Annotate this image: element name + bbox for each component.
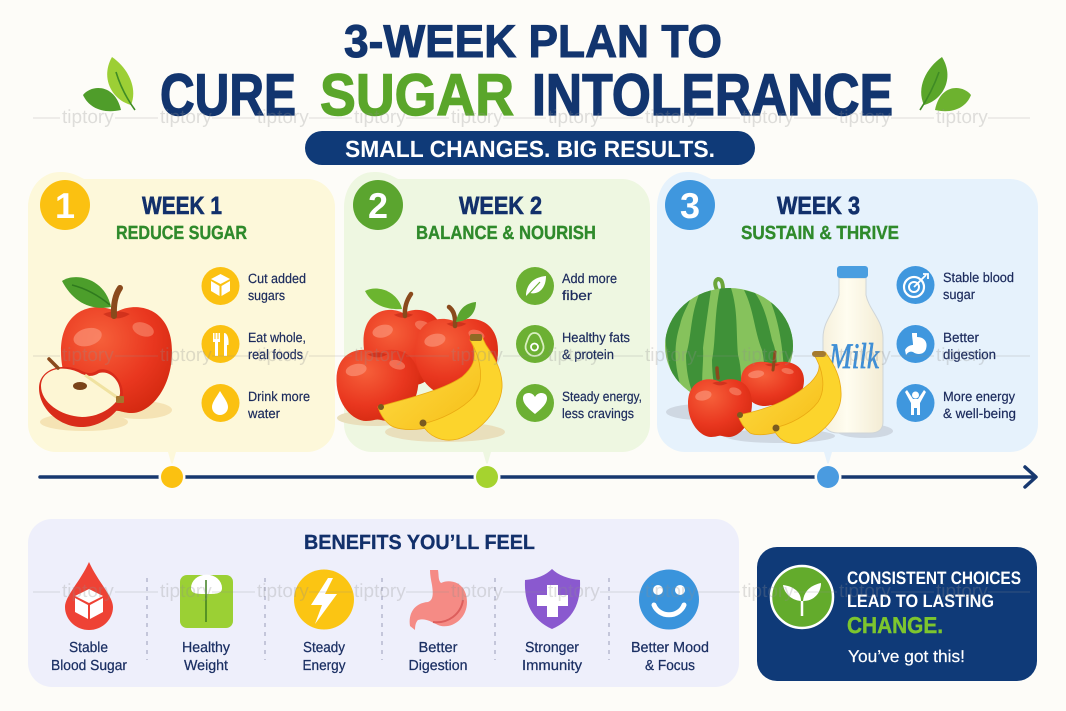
- watermark row 1: tiptory: [160, 107, 212, 128]
- panel background: [344, 172, 650, 466]
- icon: right leaves: [920, 57, 971, 111]
- panel: week 1: [28, 172, 335, 466]
- benefit: stable blood sugar: [51, 562, 127, 674]
- title line 2: sugar: SUGAR: [320, 62, 514, 128]
- callout: CHANGE.: [847, 612, 943, 638]
- item: eat whole foods: Eat whole,: [248, 330, 306, 345]
- panel background: [28, 519, 739, 687]
- watermark row 1: [33, 107, 1030, 128]
- benefit: better digestion: [408, 570, 468, 674]
- item: stable blood sugar: Stable blood: [943, 270, 1014, 285]
- watermark row 1: tiptory: [257, 107, 309, 128]
- benefit: stronger immunity: [522, 569, 583, 674]
- watermark row 1: tiptory: [839, 107, 891, 128]
- benefit: better mood: [631, 570, 709, 674]
- milk bottle: [823, 266, 883, 433]
- watermark row 1: tiptory: [742, 107, 794, 128]
- item: healthy fats: [516, 325, 630, 363]
- item: more energy: [896, 384, 1016, 422]
- benefit: steady energy: Energy: [302, 658, 346, 674]
- item: add more fiber: Add more: [562, 271, 617, 286]
- marker week 3: [814, 464, 842, 490]
- watermark row 2: tiptory: [742, 345, 794, 366]
- item: drink more water: Drink more: [248, 389, 310, 404]
- benefit: steady energy: [294, 570, 354, 674]
- icon: left leaves: [83, 57, 135, 111]
- watermark row 3: tiptory: [645, 581, 697, 602]
- heading week 1: WEEK 1: [142, 192, 222, 220]
- item: drink more water: water: [247, 406, 280, 421]
- benefit: stronger immunity: Immunity: [522, 658, 583, 674]
- benefit: healthy weight: Healthy: [182, 640, 231, 656]
- benefit: better mood: Better Mood: [631, 640, 709, 656]
- panel: benefits: [28, 519, 739, 687]
- illustration: apples and bananas: [336, 288, 505, 442]
- benefit: stable blood sugar: Stable: [69, 640, 108, 656]
- watermark row 3: tiptory: [451, 581, 503, 602]
- benefit: better mood: & Focus: [645, 658, 695, 674]
- subheading balance and nourish: BALANCE & NOURISH: [416, 223, 596, 244]
- title line 2: intolerance: INTOLERANCE: [532, 62, 893, 128]
- watermark row 1: tiptory: [62, 107, 114, 128]
- benefit: steady energy: Steady: [303, 640, 346, 656]
- item: healthy fats: Healthy fats: [562, 330, 630, 345]
- subheading sustain and thrive: SUSTAIN & THRIVE: [741, 223, 899, 244]
- panel background: [28, 172, 335, 466]
- panel: week 2: [336, 172, 650, 466]
- watermark row 2: tiptory: [451, 345, 503, 366]
- benefit: better digestion: Digestion: [408, 658, 468, 674]
- item: steady energy: Steady energy,: [562, 389, 642, 404]
- badge 3: [665, 180, 715, 230]
- heading week 2: WEEK 2: [459, 192, 542, 220]
- item: add more fiber: [516, 267, 617, 305]
- subtitle pill: SMALL CHANGES. BIG RESULTS.: [345, 136, 715, 162]
- item: stable blood sugar: [896, 266, 1014, 304]
- subtitle pill: [305, 131, 755, 165]
- badge 3: 3: [680, 185, 700, 226]
- item: cut added sugars: Cut added: [248, 271, 306, 286]
- watermark row 2: tiptory: [354, 345, 406, 366]
- illustration: watermelon, milk, fruit: [665, 266, 893, 443]
- panel: week 3: [657, 172, 1038, 466]
- heading week 3: WEEK 3: [777, 192, 860, 220]
- item: better digestion: Better: [943, 330, 979, 345]
- watermark row 3: [33, 581, 1030, 602]
- heading benefits: BENEFITS YOU’LL FEEL: [304, 531, 535, 554]
- item: more energy: More energy: [943, 389, 1015, 404]
- watermark row 3: tiptory: [257, 581, 309, 602]
- title line 2: cure: CURE: [160, 62, 296, 128]
- watermark row 2: tiptory: [936, 345, 988, 366]
- item: healthy fats: & protein: [562, 347, 614, 362]
- title line 1: 3-WEEK PLAN TO: [344, 15, 722, 67]
- item: eat whole foods: real foods: [248, 347, 303, 362]
- watermark row 2: tiptory: [62, 345, 114, 366]
- watermark row 2: tiptory: [257, 345, 309, 366]
- watermark row 2: [33, 345, 1030, 366]
- watermark row 1: tiptory: [936, 107, 988, 128]
- subheading reduce sugar: REDUCE SUGAR: [116, 223, 247, 244]
- watermark row 2: tiptory: [645, 345, 697, 366]
- watermark row 1: tiptory: [645, 107, 697, 128]
- benefit: healthy weight: [180, 575, 233, 674]
- watermark row 3: tiptory: [742, 581, 794, 602]
- watermark row 3: tiptory: [936, 581, 988, 602]
- item: more energy: & well-being: [943, 406, 1016, 421]
- watermark row 1: tiptory: [354, 107, 406, 128]
- watermark row 2: tiptory: [839, 345, 891, 366]
- item: cut added sugars: [202, 267, 306, 305]
- item: stable blood sugar: sugar: [943, 287, 975, 302]
- item: drink more water: [202, 384, 310, 422]
- callout: [757, 547, 1037, 681]
- watermark row 3: tiptory: [160, 581, 212, 602]
- milk bottle: Milk: [828, 336, 880, 376]
- watermark row 2: tiptory: [160, 345, 212, 366]
- benefit: stable blood sugar: Blood Sugar: [51, 658, 127, 674]
- callout: You’ve got this!: [848, 647, 965, 666]
- badge 1: 1: [55, 185, 75, 226]
- badge 2: 2: [368, 185, 388, 226]
- icon: sprout: [771, 566, 833, 628]
- watermark row 3: tiptory: [548, 581, 600, 602]
- timeline arrow: [40, 464, 1036, 490]
- watermelon: [665, 279, 794, 404]
- item: eat whole foods: [202, 325, 306, 363]
- watermark row 3: tiptory: [354, 581, 406, 602]
- title: [160, 15, 893, 128]
- badge 1: [40, 180, 90, 230]
- benefit: healthy weight: Weight: [184, 658, 228, 674]
- item: add more fiber: fiber: [562, 288, 593, 303]
- watermark row 3: tiptory: [62, 581, 114, 602]
- marker week 2: [474, 464, 500, 490]
- item: steady energy: less cravings: [562, 406, 634, 421]
- watermark row 2: tiptory: [548, 345, 600, 366]
- item: better digestion: [896, 325, 996, 363]
- panel background: [657, 172, 1038, 466]
- watermark row 3: tiptory: [839, 581, 891, 602]
- item: steady energy: [516, 384, 642, 422]
- watermark row 1: tiptory: [451, 107, 503, 128]
- callout: LEAD TO LASTING: [847, 591, 994, 611]
- badge 2: [353, 180, 403, 230]
- callout text: CONSISTENT CHOICES: [847, 568, 1021, 588]
- benefit: better digestion: Better: [418, 640, 458, 656]
- item: cut added sugars: sugars: [248, 288, 285, 303]
- watermark row 1: tiptory: [548, 107, 600, 128]
- benefit: stronger immunity: Stronger: [525, 640, 579, 656]
- illustration: apple: [39, 277, 172, 431]
- item: better digestion: digestion: [943, 347, 996, 362]
- marker week 1: [158, 464, 186, 490]
